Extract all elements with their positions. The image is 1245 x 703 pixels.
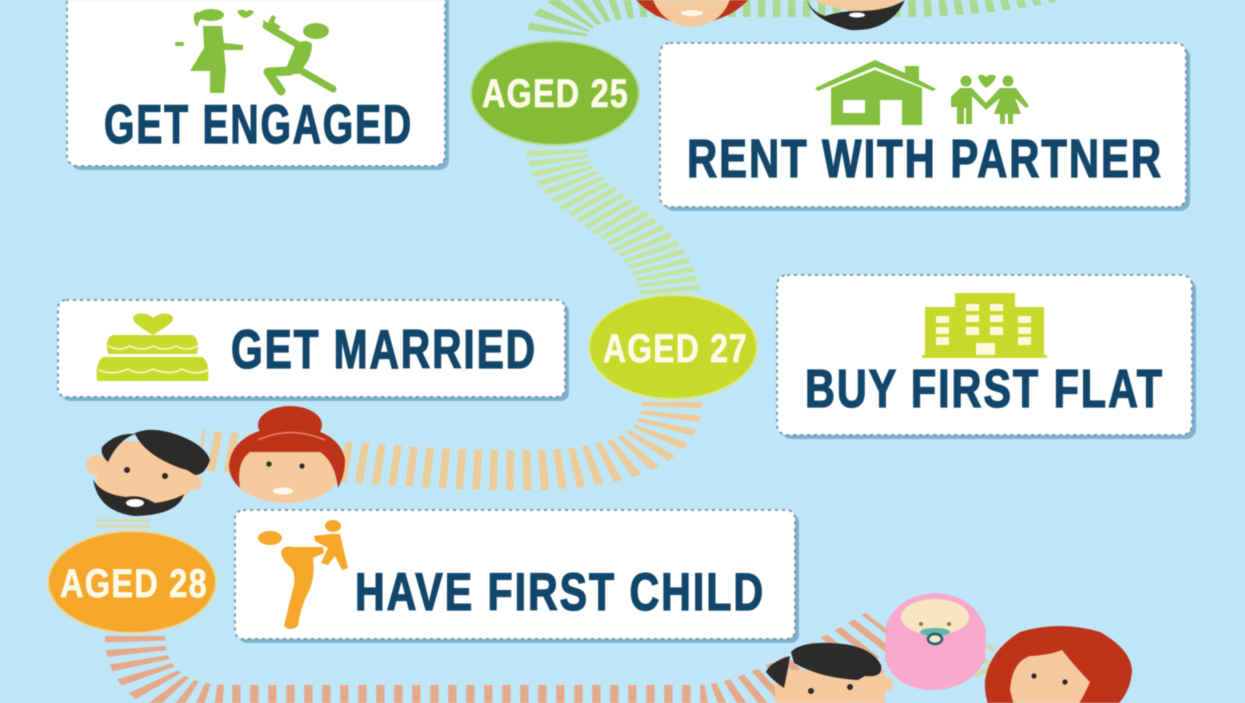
illustration: man face [86,430,210,516]
heading: get engaged: GET ENGAGED [104,93,413,155]
icon: couple with heart [951,75,1029,124]
illustration: baby in pink blanket [885,593,986,690]
panel: have first child [235,510,799,643]
illustration: woman face at top [628,0,756,27]
icon: parent lifting child [258,520,348,629]
path: short stripes below man [95,519,150,528]
path: green stripes at top [556,0,1090,36]
heading: get married: GET MARRIED [231,318,537,380]
badge: aged 25 [471,41,639,145]
panel: get engaged [67,0,449,170]
icon: house [815,60,936,125]
illustration: father face at bottom [766,643,893,703]
path: light green stripes from aged 25 to aged 27 [556,150,670,296]
badge: aged 28 [48,531,216,633]
path: tan stripes from aged 27 to couple [200,402,672,470]
heading: have first child: HAVE FIRST CHILD [355,563,765,622]
illustration: man face at top [790,0,905,30]
panel: get married [58,300,569,401]
icon: wedding cake [97,314,208,381]
badge: aged 27: AGED 27 [603,327,748,371]
illustration: mother face at bottom [985,626,1132,703]
icon: apartment building [922,293,1047,358]
badge: aged 25: AGED 25 [482,72,629,116]
icon: couple proposing [175,9,333,93]
illustration: woman face with bun [229,406,345,503]
badge: aged 28: AGED 28 [60,562,208,606]
panel: buy first flat [777,275,1196,439]
path: stripes right of baby [970,640,995,676]
badge: aged 27 [589,295,757,399]
panel: rent with partner [660,43,1190,211]
path: salmon stripes from aged 28 to family [135,628,885,703]
